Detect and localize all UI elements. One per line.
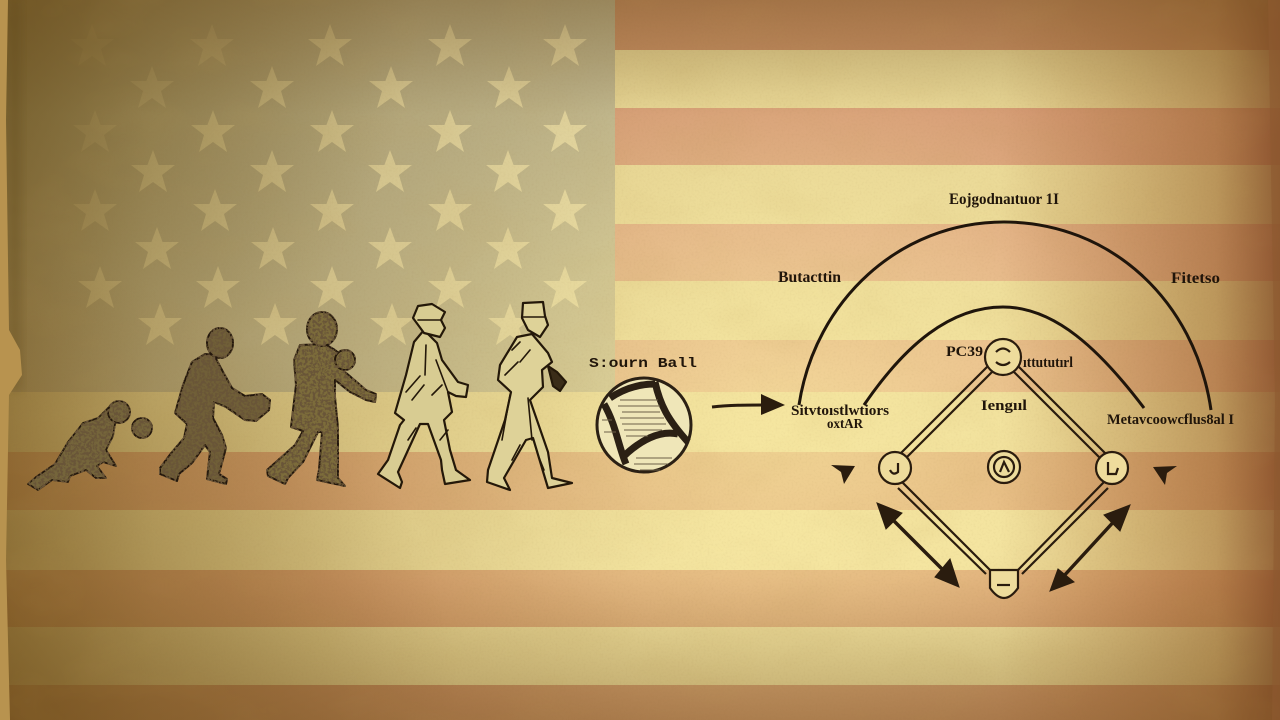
figure 2: stooped human holding large ball	[160, 328, 270, 484]
figure 1: crawling early human with ball	[28, 401, 152, 490]
icon: baseball	[597, 378, 691, 472]
field labels: oxtAR	[827, 417, 864, 432]
field labels: Metavcoowcflus8al I	[1107, 412, 1234, 428]
small arrowhead right	[1153, 466, 1177, 485]
home and bases	[879, 339, 1128, 598]
small arrowhead left	[831, 465, 855, 484]
field labels: Fitetso	[1171, 270, 1220, 287]
field labels: Sitvtoıstlwtiors	[791, 403, 889, 419]
baseball field diagram	[778, 191, 1234, 598]
double arrow: right	[1050, 505, 1130, 591]
field labels: PC39	[946, 344, 983, 360]
baseball label: S:ourn Ball	[589, 356, 697, 372]
figure 5: modern baseball player	[487, 302, 572, 490]
field labels: ıttututırl	[1023, 355, 1073, 371]
infield arc	[864, 307, 1144, 408]
base glyphs	[890, 348, 1118, 585]
infield diamond base paths	[898, 366, 1108, 574]
double arrow: left	[877, 503, 959, 587]
flag canton	[0, 0, 615, 392]
field labels	[778, 191, 1234, 432]
canton stars	[70, 24, 587, 345]
outfield arc	[799, 222, 1211, 410]
field labels: Iengııl	[981, 398, 1027, 414]
evolution sequence	[28, 302, 572, 490]
field labels: Eojgodnaıtuor 1I	[949, 191, 1059, 208]
arrow: baseball to field	[712, 394, 785, 415]
field labels: Butacttin	[778, 269, 841, 286]
figure 3: robed human holding ball	[267, 312, 376, 486]
figure 4: coated walking human	[378, 304, 470, 488]
